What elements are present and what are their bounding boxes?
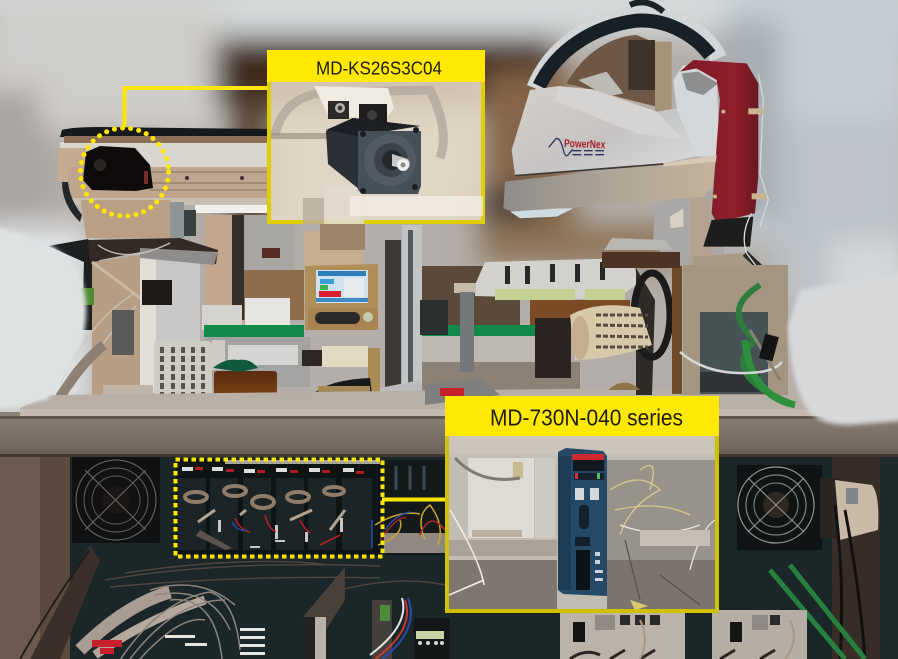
wall socket and cables [770, 478, 878, 659]
table top and front [0, 378, 898, 458]
controllers bottom right [560, 610, 807, 659]
SCARA robot [503, 2, 787, 330]
label printer head [302, 346, 380, 398]
machine cable arc [535, 14, 718, 88]
label roll [154, 340, 225, 406]
label spool and feed [535, 238, 682, 395]
callout: MD-730N-040 series [445, 396, 719, 613]
connector line from motor to callout [124, 88, 268, 127]
lower cable bundles [80, 561, 450, 659]
callout header [267, 50, 485, 82]
faded cable carrier [275, 90, 443, 158]
terminal wiring right of drives [372, 460, 446, 555]
inner arc background [567, 35, 657, 107]
dotted highlight around motor [80, 128, 168, 216]
faded roll of labels [303, 198, 325, 224]
fan right [737, 465, 822, 550]
right station with green cable [680, 265, 795, 405]
dashed highlight around drives [176, 460, 382, 556]
robot forearm [503, 155, 717, 215]
servo drive product [558, 448, 607, 596]
connector line from drives to callout [382, 498, 446, 502]
cabinet interior [0, 457, 898, 659]
motor mount bracket [314, 86, 394, 120]
background machinery [202, 195, 640, 400]
PowerNex logo [549, 138, 606, 156]
motor on axis [83, 146, 153, 191]
robot wrist and cables [703, 217, 753, 247]
servo drive boards [176, 460, 382, 555]
white masking blobs [0, 225, 898, 425]
amber tape roll [213, 360, 277, 409]
callout title: MD-730N-040 series [490, 404, 683, 430]
callout: MD-KS26S3C04 [267, 50, 485, 224]
touch panel [305, 264, 378, 330]
callout header [445, 396, 719, 436]
linear axis robot [58, 127, 270, 238]
robot rear support [653, 190, 727, 290]
PowerNex logo: PowerNex [564, 138, 606, 151]
red column [680, 60, 758, 223]
left robot column [48, 238, 218, 397]
faded power supply behind drive [449, 458, 557, 609]
fan left [72, 457, 160, 543]
motor product [326, 101, 421, 194]
faded wiring behind drive [607, 460, 715, 610]
callout title: MD-KS26S3C04 [316, 58, 442, 78]
robot arm cover [512, 86, 695, 175]
